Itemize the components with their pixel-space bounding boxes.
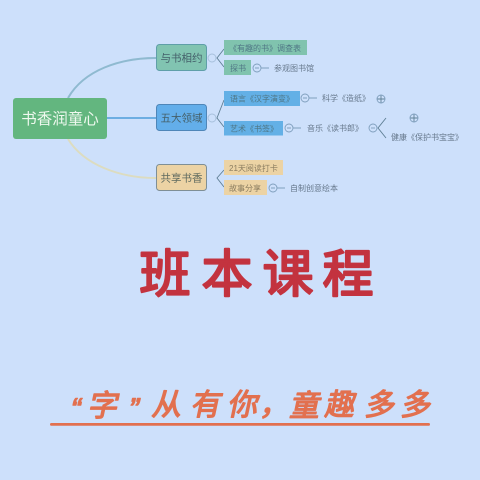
slogan: ， <box>258 389 294 422</box>
mind map <box>13 40 463 195</box>
leaf: 语言: 科学《造纸》 <box>322 93 370 103</box>
leaf: 艺术 <box>224 114 463 142</box>
slogan: 多 <box>363 388 400 422</box>
slogan: 有 <box>189 388 226 422</box>
slogan: 多 <box>399 388 436 422</box>
leaf: 故事分享: 故事分享 <box>229 183 261 193</box>
branch: 与书相约 <box>156 40 314 75</box>
slogan: ” <box>126 393 142 426</box>
leaf: 有趣的书调查表: 《有趣的书》调查表 <box>229 43 301 53</box>
icon: plus <box>377 95 385 103</box>
leaf: 21天阅读打卡: 21天阅读打卡 <box>229 163 278 173</box>
slogan: 从 <box>150 389 186 422</box>
leaf: 21天阅读打卡 <box>224 160 283 175</box>
leaf: 探书 <box>224 60 314 75</box>
branch: 五大领域: 五大领域 <box>160 112 203 124</box>
slogan: 童 <box>288 389 325 423</box>
leaf: 语言 <box>224 91 385 106</box>
leaf: 探书: 探书 <box>230 63 246 73</box>
root node: 书香润童心 <box>21 109 99 128</box>
icon: plus <box>410 114 418 122</box>
leaf: 艺术: 艺术《书签》 <box>230 124 278 134</box>
connector: root to third branch <box>68 139 156 178</box>
icon: plus circle <box>377 95 385 103</box>
title <box>139 246 374 303</box>
leaf: 有趣的书调查表 <box>224 40 307 55</box>
connector: root to second branch <box>107 117 156 119</box>
leaf: 探书: 参观图书馆 <box>274 63 314 73</box>
slogan: 趣 <box>323 388 360 422</box>
leaf: 故事分享 <box>224 180 338 195</box>
title: 班 <box>139 246 191 303</box>
leaf: 艺术: 健康《保护书宝宝》 <box>391 132 463 142</box>
branch: 共享书香 <box>156 160 338 195</box>
slogan: “ <box>68 393 84 426</box>
title: 程 <box>322 246 374 303</box>
root node <box>13 98 107 139</box>
leaf: 语言: 语言《汉字演变》 <box>230 94 294 104</box>
branch: 五大领域 <box>156 91 463 142</box>
slogan <box>68 388 436 426</box>
slogan: 字 <box>86 389 123 423</box>
title: 本 <box>201 246 253 303</box>
connector: root to first branch <box>68 58 156 98</box>
slogan underline <box>50 423 430 426</box>
branch: 共享书香: 共享书香 <box>160 172 203 184</box>
leaf: 故事分享: 自制创意绘本 <box>290 183 338 193</box>
leaf: 艺术: 音乐《读书郎》 <box>307 123 363 133</box>
branch: 与书相约: 与书相约 <box>160 52 202 64</box>
slogan: 你 <box>226 388 263 422</box>
title: 课 <box>262 246 314 303</box>
